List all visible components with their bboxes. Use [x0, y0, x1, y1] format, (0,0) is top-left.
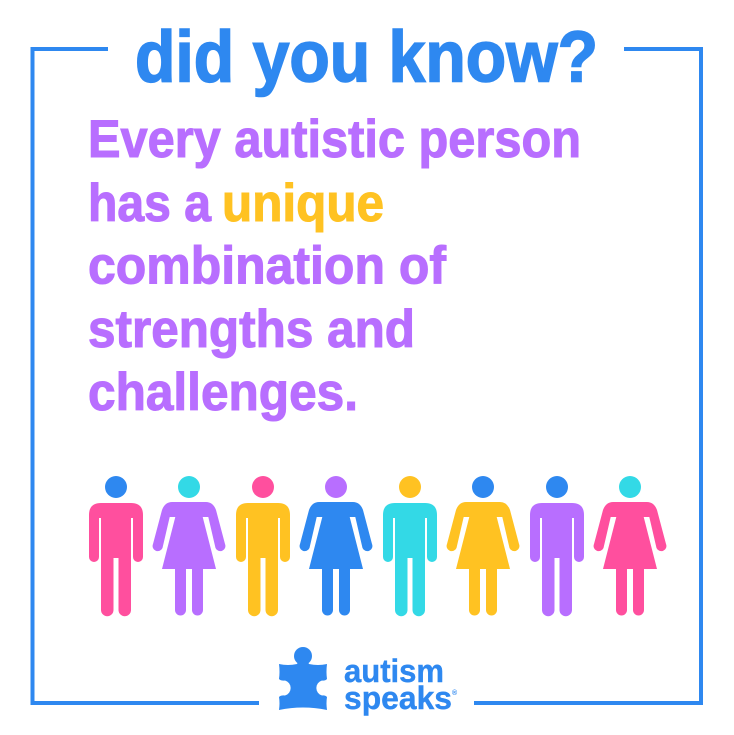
main message text: unique: [222, 174, 384, 233]
person 8: [594, 476, 666, 616]
main message text: Every autistic person: [88, 110, 581, 169]
logo wordmark: [344, 653, 458, 716]
logo wordmark: autism: [344, 653, 444, 689]
main message text: has a: [88, 174, 211, 233]
main message text: strengths and: [88, 300, 415, 359]
person 3: [236, 476, 290, 616]
row of people icons: [89, 476, 666, 616]
main message text: [88, 110, 581, 422]
logo wordmark: ®: [452, 689, 458, 697]
main message text: challenges.: [88, 363, 358, 422]
main message text: combination of: [88, 236, 446, 296]
icon: puzzle piece logo: [279, 647, 327, 710]
person 1: [89, 476, 143, 616]
logo wordmark: speaks: [344, 680, 452, 716]
title: did you know?: [135, 18, 598, 98]
person 2: [153, 476, 225, 616]
person 6: [447, 476, 519, 616]
person 7: [530, 476, 584, 616]
person 4: [300, 476, 372, 616]
person 5: [383, 476, 437, 616]
